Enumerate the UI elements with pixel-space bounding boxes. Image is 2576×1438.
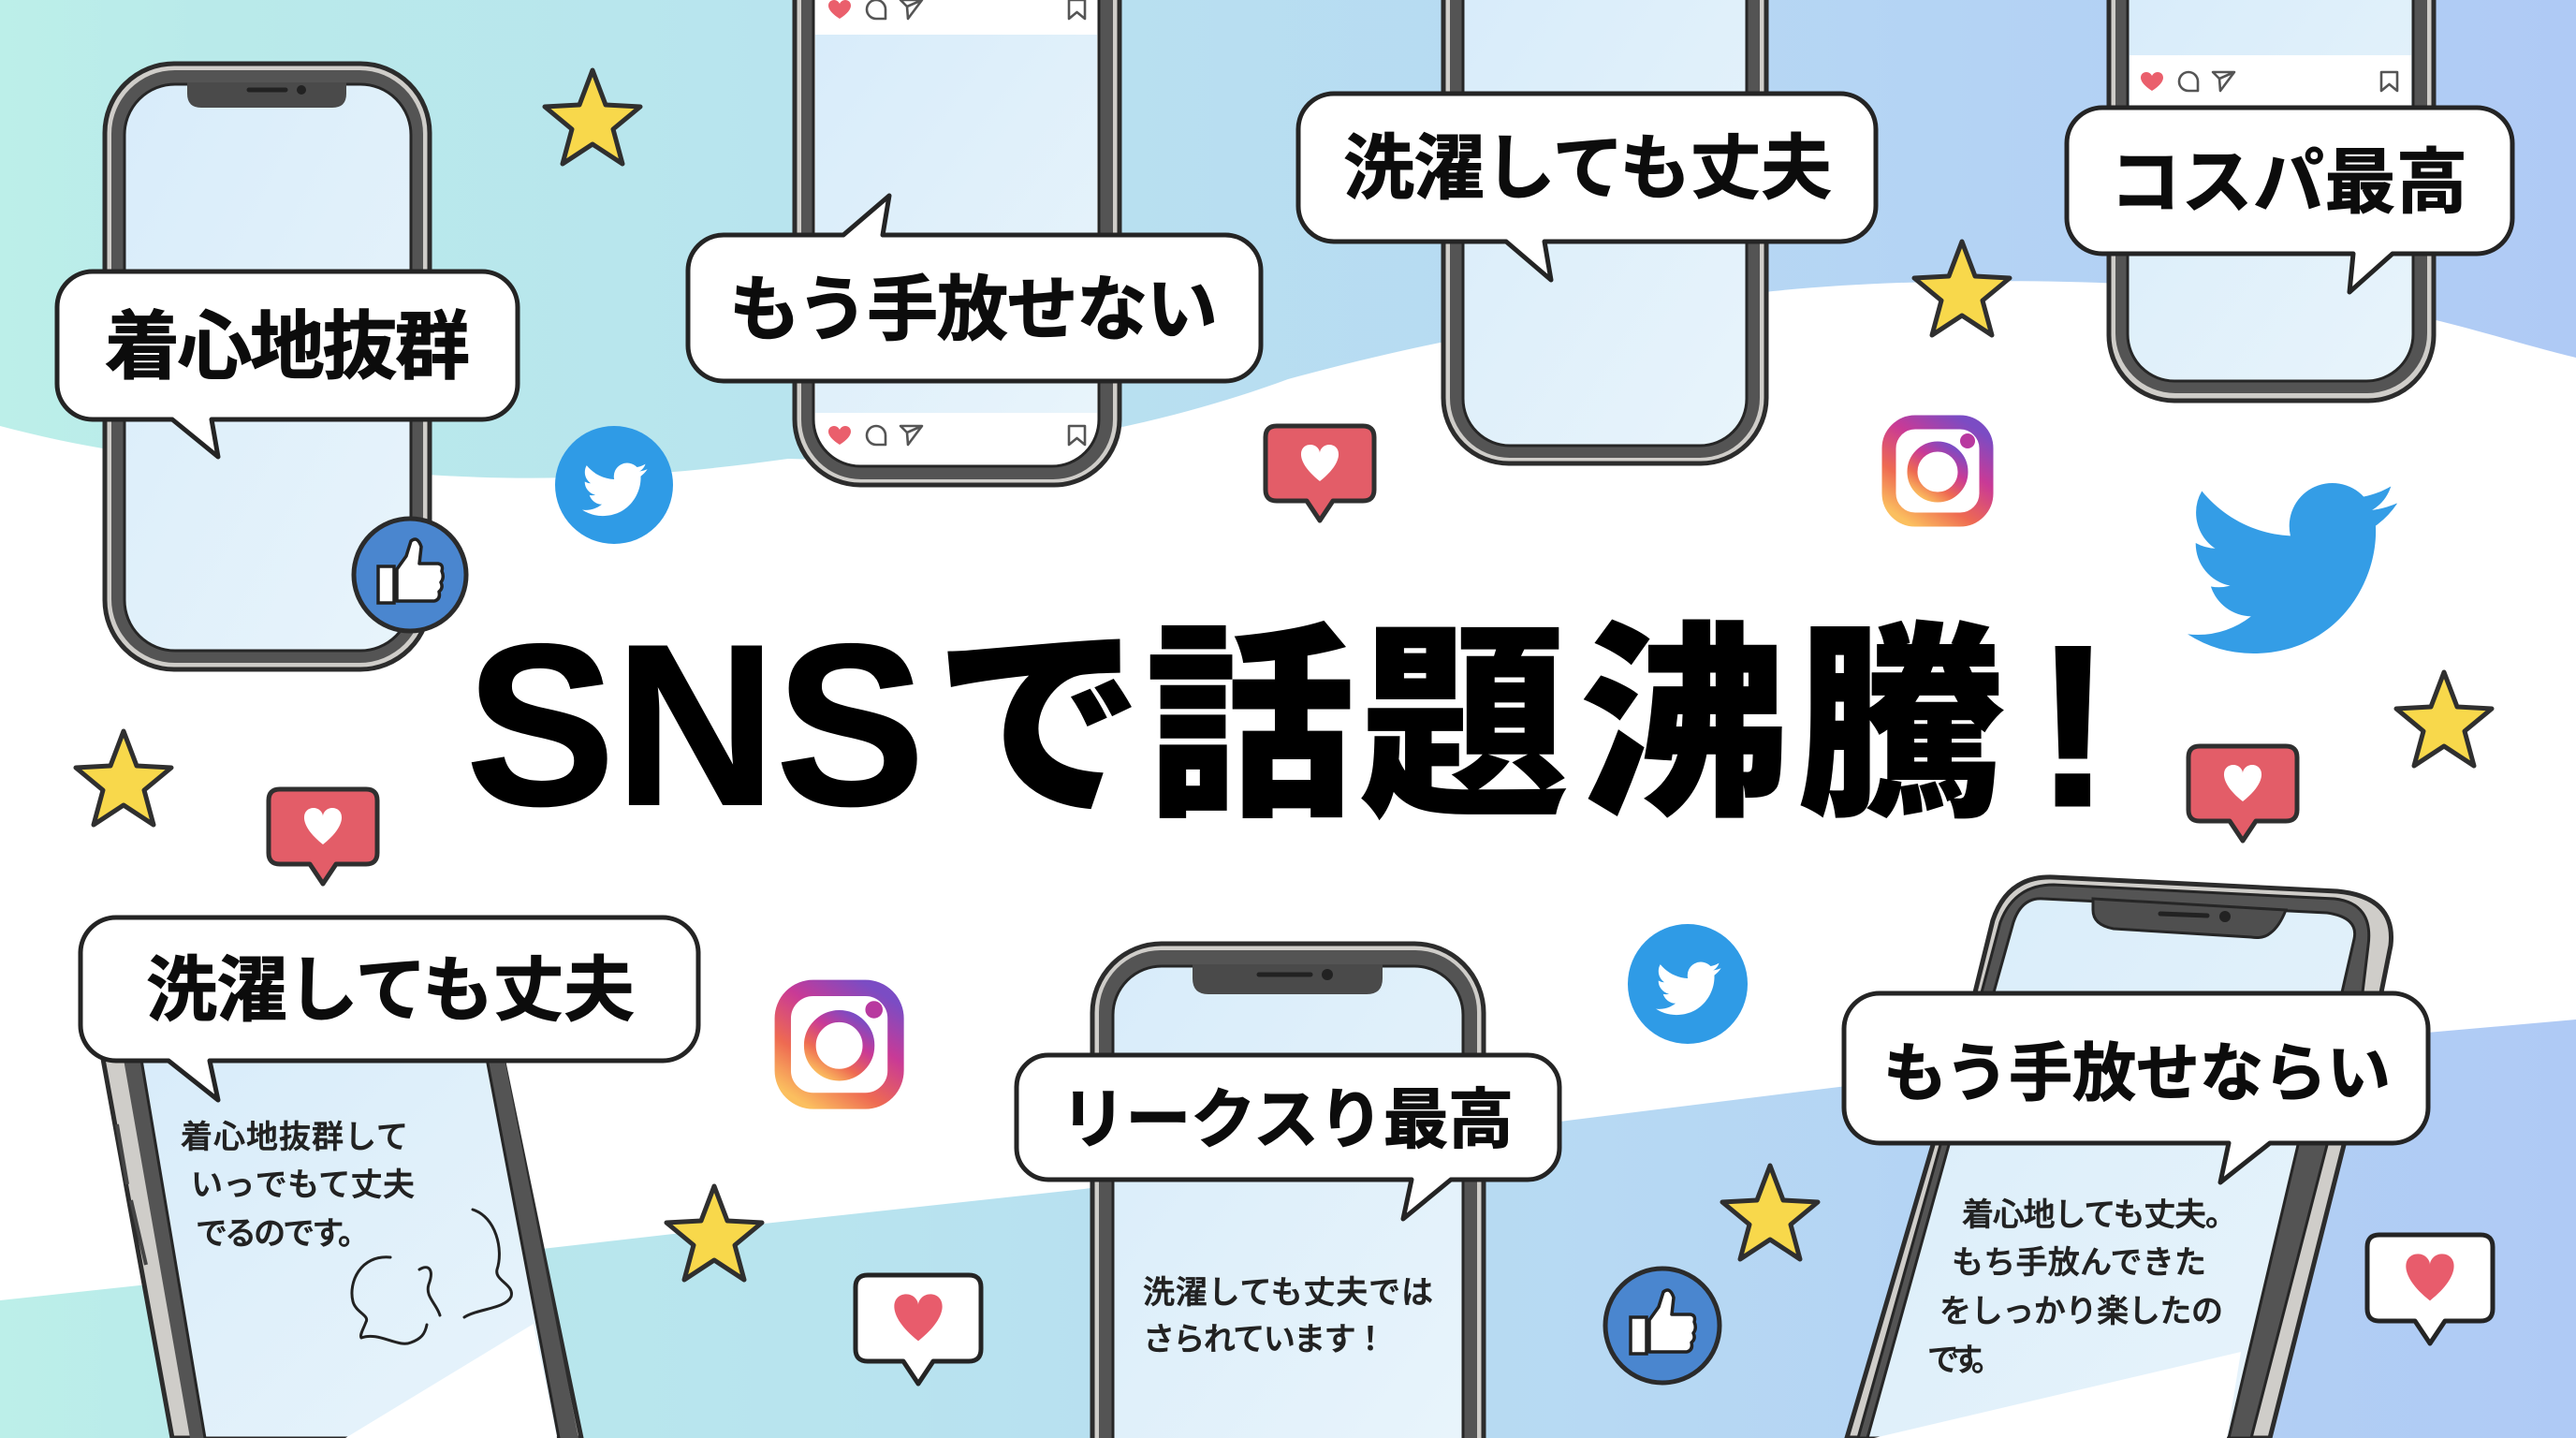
icon: star 6 [1722,1166,1818,1259]
icon: white heart bubble 1 [856,1275,981,1384]
notch [1193,964,1383,994]
phone: bottom left tilted [101,1049,581,1438]
doodle [352,1210,511,1343]
speech bubble: もう手放せならい: もう手放せならい [1883,1038,2391,1109]
speech bubble: 着心地抜群 [57,271,518,457]
title: ! [2035,597,2112,854]
action icons upper [828,0,1085,19]
speech bubble: コスパ最高 [2067,108,2512,292]
screen text: 洗濯しても丈夫では [1143,1275,1433,1311]
icon: red heart bubble 3 [2188,746,2297,841]
screen text: 着心地しても丈夫。 [1962,1197,2237,1233]
icon: red heart bubble 2 [269,789,377,884]
screen text: もち手放んできた [1952,1245,2206,1281]
screen text [181,1120,415,1252]
screen text: 着心地抜群して [181,1120,408,1155]
notch [187,82,346,108]
title: SNS [466,596,925,853]
action icons [2141,72,2397,91]
screen text: さられています！ [1143,1322,1386,1357]
notch [2093,899,2286,938]
screen text [1143,1275,1433,1357]
speech bubble: もう手放せない: もう手放せない [729,271,1218,350]
screen text: をしっかり楽したの [1939,1294,2223,1329]
phone: top left [105,64,430,669]
phone: bottom right tilted [1847,877,2392,1438]
phone: top right [2109,0,2434,401]
icon: instagram 1 [1889,422,1986,520]
screen text [1927,1197,2237,1378]
icon: star 2 [1914,242,2010,335]
icon: large twitter bird [2188,483,2397,653]
speech bubble: 洗濯しても丈夫 top [1298,94,1876,280]
phone: bottom centre [1092,944,1484,1438]
screen text: でるのです。 [196,1216,370,1252]
speech bubble: コスパ最高: コスパ最高 [2110,143,2467,223]
speech bubble: もう手放せならい [1844,993,2428,1182]
screen text: いっでもて丈夫 [191,1167,415,1203]
speech bubble: リークスり最高: リークスり最高 [1061,1083,1514,1156]
title: 話題沸騰 [1146,610,2005,843]
speech bubble: もう手放せない [688,196,1261,381]
icon: red heart bubble 1 [1266,426,1374,521]
icon: twitter circle 1 [555,426,673,544]
icon: star 5 [666,1186,762,1280]
icon: white heart bubble 2 [2367,1235,2493,1343]
phone: top right-centre [1443,0,1766,463]
icon: thumbs up 1 [354,519,466,631]
screen text: です。 [1927,1343,2003,1378]
icon: star 1 [545,70,640,164]
action icons lower [828,426,1085,445]
title [466,596,2112,854]
speech bubble: 着心地抜群: 着心地抜群 [105,305,470,389]
side buttons [117,1124,146,1265]
icon: star 4 [76,731,171,825]
speech bubble: 洗濯しても丈夫 top: 洗濯しても丈夫 [1343,129,1832,209]
phone: top centre [795,0,1120,485]
speech bubble: 洗濯しても丈夫 bottom [80,917,698,1100]
speech bubble: リークスり最高 [1017,1055,1559,1219]
icon: twitter circle 2 [1628,924,1748,1044]
speech bubble: 洗濯しても丈夫 bottom: 洗濯しても丈夫 [146,951,635,1031]
icon: instagram 2 [783,988,896,1101]
title: で [935,610,1143,843]
icon: star 3 [2396,672,2492,766]
icon: thumbs up 2 [1605,1269,1720,1383]
